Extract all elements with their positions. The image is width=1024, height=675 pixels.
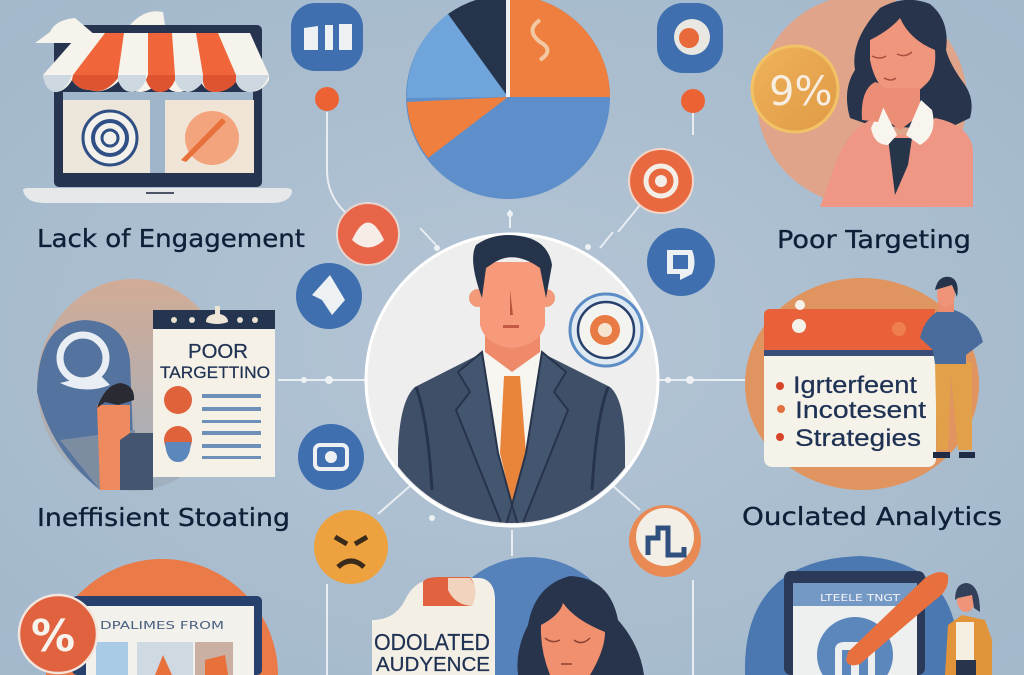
panel: bottom left laptop: DPALIMES FROM: [100, 619, 224, 632]
panel: bottom left laptop: [19, 559, 278, 675]
panel: lack of engagement laptop storefront: [23, 11, 292, 203]
panel: poor targeting woman: [752, 0, 973, 207]
label: outdated analytics: Ouclated Analytics: [742, 502, 1002, 531]
panel: inefficient storting: [37, 279, 229, 491]
panel: poor targeting woman: 9%: [769, 69, 832, 115]
panel: bottom right tablet: [745, 556, 992, 675]
panel: outdated audience scroll: [372, 557, 623, 675]
icon: orange building: [629, 505, 701, 577]
icon: blue phone: [298, 424, 364, 490]
central figure: [366, 234, 658, 530]
icon: chat bubble: [647, 228, 715, 296]
panel: inconsistent strategies: Incotesent: [795, 397, 926, 424]
label: inefficient storting: Ineffisient Stoating: [37, 503, 290, 532]
icon: top left badge: [291, 3, 363, 111]
panel: bottom left laptop: %: [31, 611, 75, 662]
panel: poor targeting clipboard: TARGETTINO: [160, 363, 270, 382]
label: lack of engagement: Lack of Engagement: [37, 224, 305, 253]
label: poor targeting: Poor Targeting: [777, 225, 971, 254]
panel: bottom right tablet: LTEELE TNGT: [820, 593, 901, 604]
woman bottom centre: [517, 576, 644, 675]
icon: orange person: [337, 203, 399, 265]
panel: poor targeting clipboard: [153, 306, 275, 477]
icon: sad face: [314, 510, 388, 584]
panel: poor targeting clipboard: POOR: [188, 341, 248, 363]
icon: blue bird: [296, 263, 362, 329]
icon: top right badge: [657, 3, 723, 113]
panel: inconsistent strategies: Strategies: [795, 425, 921, 452]
panel: outdated audience scroll: ODOLATED: [374, 629, 490, 655]
panel: inconsistent strategies: [745, 277, 983, 490]
panel: inconsistent strategies: Igrterfeent: [793, 372, 917, 399]
pie chart: [406, 0, 610, 199]
icon: orange at: [629, 149, 693, 213]
